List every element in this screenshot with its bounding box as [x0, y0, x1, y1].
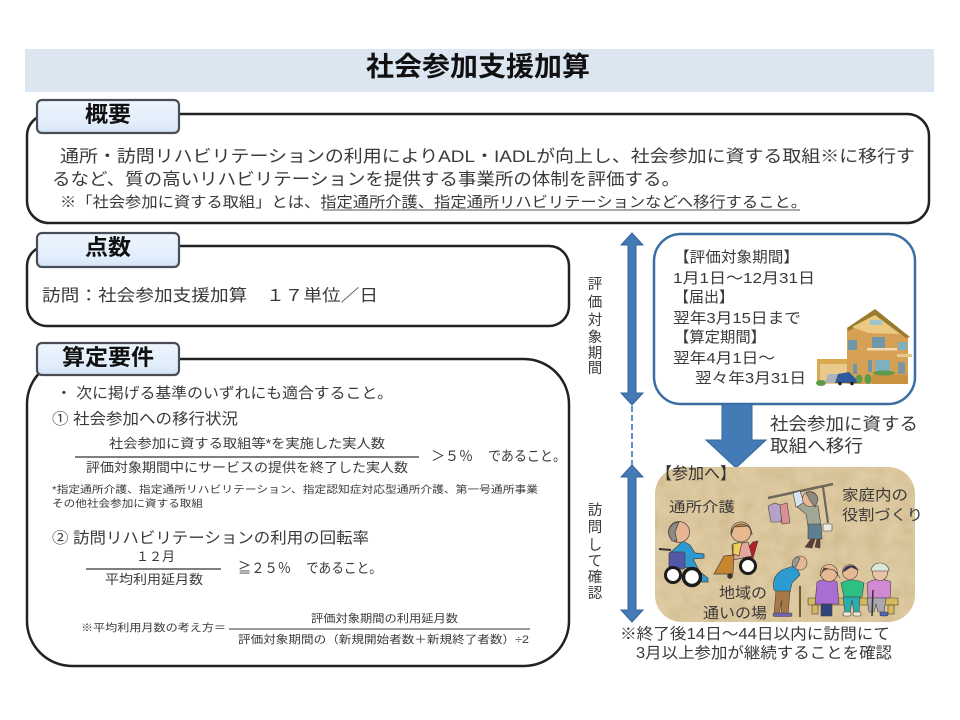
requirements heading tab: 算定要件	[62, 345, 154, 370]
points text: 訪問：社会参加支援加算 １７単位／日	[42, 286, 378, 305]
illustration: bent man with cane	[773, 556, 807, 617]
participation heading: 【参加へ】	[656, 464, 736, 483]
vertical label: visit and confirm	[588, 502, 603, 602]
vertical label: visit and confirm: 訪	[588, 502, 602, 519]
label: household role: 家庭内の	[842, 487, 908, 504]
requirement 1 heading: ① 社会参加への移行状況	[52, 410, 238, 428]
requirement 1 formula: ＞５％	[431, 448, 473, 464]
requirement 2 formula: であること。	[306, 560, 382, 576]
average usage note formula: 評価対象期間の（新規開始者数＋新規終了者数）÷2	[238, 632, 529, 646]
transition label: 社会参加に資する	[770, 414, 918, 434]
average usage note formula	[81, 612, 530, 646]
schedule text: 【評価対象期間】	[674, 249, 799, 266]
title band	[25, 49, 934, 92]
vertical label: evaluation period: 価	[588, 294, 602, 311]
requirements lead text: ・ 次に掲げる基準のいずれにも適合すること。	[56, 385, 393, 402]
schedule text: 【届出】	[674, 289, 734, 306]
panel: schedule	[654, 234, 915, 404]
title band: 社会参加支援加算	[366, 52, 590, 82]
requirement 1 formula: 評価対象期間中にサービスの提供を終了した実人数	[86, 460, 408, 475]
requirement 1 formula: であること。	[488, 448, 566, 464]
requirement 1 footnote: その他社会参加に資する取組	[52, 497, 203, 510]
requirement 1 footnote	[52, 483, 538, 510]
overview text	[52, 147, 915, 211]
label: household role	[842, 487, 923, 524]
confirmation note: ※終了後14日～44日以内に訪問にて	[620, 625, 890, 643]
schedule text: 翌年3月15日まで	[673, 310, 801, 327]
label: community gathering place: 地域の	[719, 585, 767, 602]
overview heading tab	[37, 100, 179, 133]
points heading tab	[37, 233, 179, 267]
schedule text: 【算定期間】	[674, 328, 766, 346]
requirement 1 footnote: *指定通所介護、指定通所リハビリテーション、指定認知症対応型通所介護、第一号通所事業	[52, 483, 538, 496]
label: community gathering place: 通いの場	[703, 605, 767, 622]
arrow: transition to participation	[706, 404, 766, 468]
average usage note formula: 評価対象期間の利用延月数	[311, 612, 458, 625]
vertical label: visit and confirm: し	[588, 538, 602, 554]
schedule text: 翌々年3月31日	[695, 370, 806, 387]
illustration: woman hanging laundry	[768, 484, 833, 548]
average usage note formula: ※平均利用月数の考え方＝	[81, 621, 226, 634]
vertical label: evaluation period	[588, 277, 602, 377]
illustration: woman in wheelchair	[714, 522, 758, 578]
label: household role: 役割づくり	[842, 507, 923, 524]
arrow: evaluation period	[621, 233, 643, 405]
schedule text: 1月1日～12月31日	[673, 270, 815, 287]
transition label: 取組へ移行	[770, 436, 863, 456]
schedule text: 翌年4月1日～	[673, 350, 775, 367]
illustration: man in wheelchair	[659, 522, 708, 586]
overview text: ※「社会参加に資する取組」とは、指定通所介護、指定通所リハビリテーションなどへ移行すること。	[60, 194, 807, 211]
vertical label: evaluation period: 評	[588, 277, 602, 293]
requirement 2 heading: ② 訪問リハビリテーションの利用の回転率	[52, 529, 369, 547]
panel: points	[27, 233, 569, 326]
overview heading tab: 概要	[85, 102, 131, 127]
vertical label: visit and confirm: 認	[588, 586, 603, 602]
vertical label: visit and confirm: て	[588, 554, 602, 570]
vertical label: evaluation period: 対	[588, 312, 602, 329]
requirement 2 formula: 平均利用延月数	[105, 572, 203, 587]
requirements heading tab	[37, 343, 179, 375]
confirmation note: 3月以上参加が継続することを確認	[636, 644, 893, 662]
overview text: るなど、質の高いリハビリテーションを提供する事業所の体制を評価する。	[52, 170, 680, 189]
vertical label: evaluation period: 期	[588, 345, 602, 362]
label: day care: 通所介護	[669, 499, 735, 515]
transition label	[770, 414, 918, 456]
panel: overview	[27, 100, 929, 223]
points heading tab: 点数	[85, 235, 131, 260]
vertical label: evaluation period: 象	[588, 329, 602, 346]
illustration: three people on bench	[808, 563, 898, 616]
arrow: visit confirmation	[621, 465, 643, 622]
overview text: 通所・訪問リハビリテーションの利用によりADL・IADLが向上し、社会参加に資する取組※に移行す	[60, 147, 915, 166]
icon: house	[816, 309, 912, 386]
confirmation note	[620, 625, 893, 662]
vertical label: visit and confirm: 問	[588, 520, 602, 536]
requirement 2 formula	[86, 549, 382, 587]
vertical label: evaluation period: 間	[588, 361, 602, 377]
label: community gathering place	[703, 585, 767, 622]
requirement 2 formula: １２月	[136, 549, 175, 564]
schedule text	[673, 249, 815, 387]
panel: calculation requirements	[27, 343, 569, 666]
vertical label: visit and confirm: 確	[588, 569, 602, 586]
requirement 1 formula	[75, 436, 566, 475]
requirement 1 formula: 社会参加に資する取組等*を実施した実人数	[109, 436, 385, 451]
requirement 2 formula: ≧２５％	[238, 560, 291, 576]
panel: participation	[655, 464, 923, 622]
